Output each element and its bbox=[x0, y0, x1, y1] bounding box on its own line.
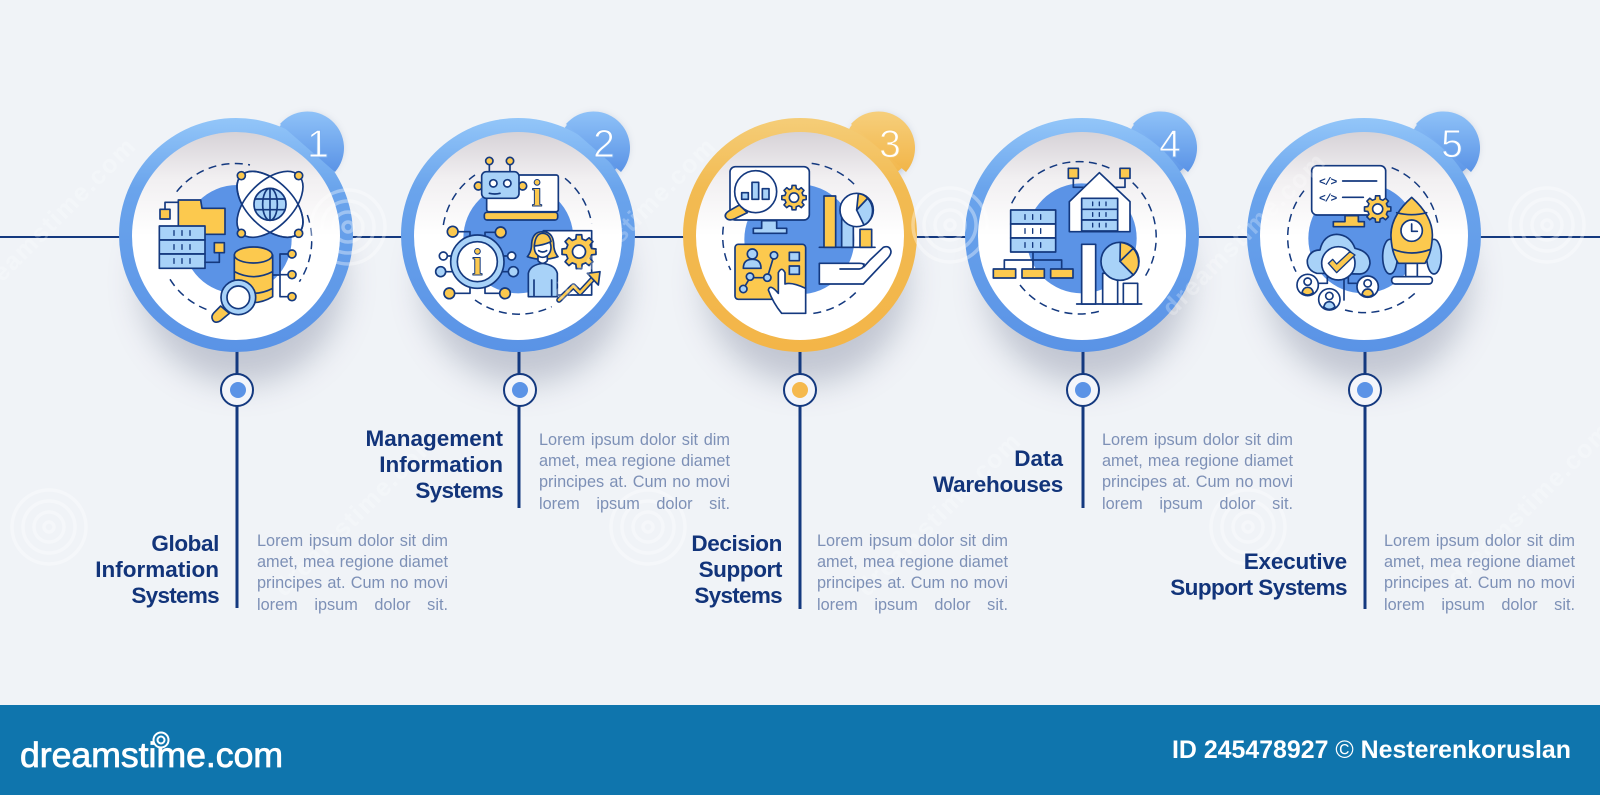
timeline node bbox=[504, 374, 536, 406]
number badge 1 bbox=[274, 112, 342, 180]
number 3: 3 bbox=[879, 123, 901, 166]
watermark text bbox=[0, 132, 1600, 602]
icon: robot, info network and analyst bbox=[436, 157, 600, 314]
heading: step 4: Warehouses bbox=[933, 472, 1063, 497]
heading: step 3: Support bbox=[699, 557, 782, 582]
icon: code monitor, cloud users and rocket: </> bbox=[1319, 193, 1338, 205]
inner circle bbox=[132, 132, 340, 340]
heading: step 3: Decision bbox=[691, 531, 782, 556]
text block: step 1: lorem ipsum dolor sit. bbox=[257, 596, 448, 614]
circle shadow bbox=[1267, 180, 1471, 384]
circle shadow bbox=[422, 180, 626, 384]
text block: step 2: principes at. Cum no movi bbox=[539, 473, 730, 491]
logo: spiral bbox=[154, 732, 168, 748]
horizontal timeline bbox=[0, 236, 1600, 238]
heading: step 1: Systems bbox=[131, 583, 219, 608]
text block: step 2: amet, mea regione diamet bbox=[539, 452, 730, 470]
text block: step 3 bbox=[817, 532, 1008, 614]
text block: step 1 bbox=[257, 532, 448, 614]
badge blend bbox=[851, 111, 915, 172]
heading: step 4 bbox=[933, 446, 1064, 497]
connector stem bbox=[798, 350, 802, 609]
heading: step 2 bbox=[365, 426, 503, 503]
circle shadow bbox=[985, 180, 1189, 384]
heading: step 4: Data bbox=[1014, 446, 1063, 471]
heading: step 5 bbox=[1170, 549, 1347, 600]
text block: step 5 bbox=[1384, 532, 1575, 614]
watermark text: dreamstime.com bbox=[852, 427, 1027, 602]
circle shadow bbox=[140, 180, 344, 384]
ring bbox=[683, 118, 917, 352]
ring bbox=[401, 118, 635, 352]
watermark spirals bbox=[12, 188, 1584, 564]
heading: step 2: Management bbox=[365, 426, 503, 451]
number badge 2 bbox=[560, 112, 628, 180]
heading: step 2: Information bbox=[379, 452, 503, 477]
watermark text: dreamstime.com bbox=[547, 132, 722, 307]
text block: step 1: Lorem ipsum dolor sit dim bbox=[257, 532, 448, 550]
logo text: dreamstime.com bbox=[20, 736, 283, 775]
watermark text: dreamstime.com bbox=[269, 427, 444, 602]
number 4: 4 bbox=[1159, 123, 1181, 166]
inner circle bbox=[414, 132, 622, 340]
text block: step 4: amet, mea regione diamet bbox=[1102, 452, 1293, 470]
footer banner bbox=[0, 705, 1600, 795]
panel: step 1 graphic bbox=[119, 111, 353, 608]
icon: data warehouse bbox=[993, 162, 1156, 314]
number 1: 1 bbox=[307, 123, 329, 166]
connector stem bbox=[1082, 350, 1084, 508]
heading: step 1 bbox=[95, 531, 219, 608]
text block: step 3: principes at. Cum no movi bbox=[817, 574, 1008, 592]
text block: step 3: amet, mea regione diamet bbox=[817, 553, 1008, 571]
badge blend bbox=[1133, 111, 1197, 172]
ring bbox=[1247, 118, 1481, 352]
inner circle bbox=[978, 132, 1186, 340]
panel: step 4 graphic bbox=[965, 111, 1199, 508]
text block: step 4: lorem ipsum dolor sit. bbox=[1102, 495, 1293, 513]
text block: step 2: Lorem ipsum dolor sit dim bbox=[539, 431, 730, 449]
icon: robot, info network and analyst: i bbox=[472, 242, 483, 284]
icon: code monitor, cloud users and rocket bbox=[1288, 166, 1441, 313]
heading: step 5: Support Systems bbox=[1170, 575, 1347, 600]
text block: step 4: principes at. Cum no movi bbox=[1102, 473, 1293, 491]
connector stem bbox=[236, 350, 238, 608]
text block: step 4 bbox=[1102, 431, 1293, 513]
text block: step 5: lorem ipsum dolor sit. bbox=[1384, 596, 1575, 614]
number badge 4 bbox=[1127, 112, 1195, 180]
panel: step 5 graphic bbox=[1247, 111, 1481, 609]
badge blend bbox=[566, 111, 630, 172]
timeline node bbox=[1349, 374, 1381, 406]
text block: step 1: principes at. Cum no movi bbox=[257, 574, 448, 592]
ring bbox=[119, 118, 353, 352]
text block: step 2: lorem ipsum dolor sit. bbox=[539, 495, 730, 513]
badge blend bbox=[280, 111, 344, 172]
number badge 5 bbox=[1410, 112, 1478, 180]
watermark text: dreamstime.com bbox=[1157, 147, 1332, 322]
number 5: 5 bbox=[1441, 123, 1463, 166]
icon: data, globe and search bbox=[159, 160, 315, 322]
image id and author credit: ID 245478927 © Nesterenkoruslan bbox=[1172, 736, 1571, 764]
text block: step 2 bbox=[539, 431, 730, 513]
heading: step 1: Information bbox=[95, 557, 219, 582]
icon: decision analytics dashboard bbox=[723, 163, 891, 313]
text block: step 5: principes at. Cum no movi bbox=[1384, 574, 1575, 592]
panel: step 2 graphic bbox=[401, 111, 635, 508]
connector stem bbox=[1364, 350, 1366, 609]
text block: step 5: amet, mea regione diamet bbox=[1384, 553, 1575, 571]
heading: step 3 bbox=[691, 531, 782, 608]
badge blend bbox=[1416, 111, 1480, 172]
heading: step 2: Systems bbox=[415, 478, 503, 503]
text block: step 5: Lorem ipsum dolor sit dim bbox=[1384, 532, 1575, 550]
inner circle bbox=[696, 132, 904, 340]
timeline node bbox=[1067, 374, 1099, 406]
panel: step 3 graphic bbox=[683, 111, 917, 609]
icon: code monitor, cloud users and rocket: </> bbox=[1319, 177, 1338, 189]
text block: step 3: Lorem ipsum dolor sit dim bbox=[817, 532, 1008, 550]
heading: step 1: Global bbox=[151, 531, 219, 556]
text block: step 4: Lorem ipsum dolor sit dim bbox=[1102, 431, 1293, 449]
number badge 3 bbox=[845, 112, 913, 180]
heading: step 3: Systems bbox=[694, 583, 782, 608]
connector stem bbox=[518, 350, 520, 508]
icon: robot, info network and analyst: i bbox=[532, 173, 543, 215]
timeline node bbox=[784, 374, 816, 406]
inner circle bbox=[1260, 132, 1468, 340]
timeline node bbox=[221, 374, 253, 406]
text block: step 1: amet, mea regione diamet bbox=[257, 553, 448, 571]
number 2: 2 bbox=[593, 123, 615, 166]
text block: step 3: lorem ipsum dolor sit. bbox=[817, 596, 1008, 614]
ring bbox=[965, 118, 1199, 352]
circle shadow bbox=[704, 180, 908, 384]
heading: step 5: Executive bbox=[1244, 549, 1347, 574]
